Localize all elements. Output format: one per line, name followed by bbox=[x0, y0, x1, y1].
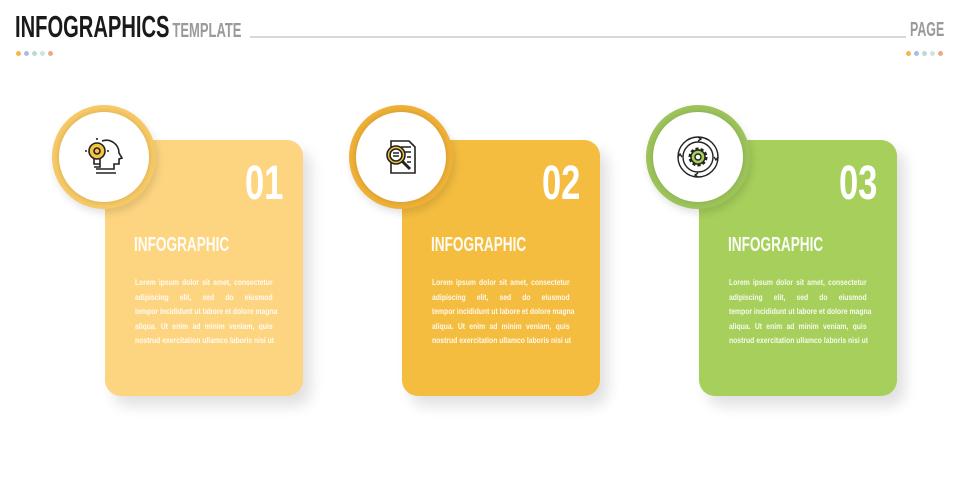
header title: INFOGRAPHICS TEMPLATE bbox=[15, 9, 241, 44]
panel 02 bbox=[402, 140, 600, 396]
icon circle 02: document magnifier bbox=[349, 105, 453, 209]
header line bbox=[250, 36, 906, 38]
heading 02: INFOGRAPHIC bbox=[431, 234, 526, 256]
body text 02: adipiscing elit, sed do eiusmod bbox=[432, 292, 570, 302]
body text 03: adipiscing elit, sed do eiusmod bbox=[729, 292, 867, 302]
icon circle 03: gear cycle bbox=[646, 105, 750, 209]
number 02: 02 bbox=[542, 157, 580, 210]
body text 02 bbox=[432, 277, 574, 345]
heading 01: INFOGRAPHIC bbox=[134, 234, 229, 256]
body text 01: aliqua. Ut enim ad minim veniam, quis bbox=[135, 320, 273, 330]
body text 01: tempor incididunt ut labore et dolore magna bbox=[135, 306, 277, 316]
body text 03 bbox=[729, 277, 872, 345]
body text 03: Lorem ipsum dolor sit amet, consectetur bbox=[729, 277, 867, 287]
body text 01: adipiscing elit, sed do eiusmod bbox=[135, 292, 273, 302]
panel 01 bbox=[105, 140, 303, 396]
body text 02: aliqua. Ut enim ad minim veniam, quis bbox=[432, 320, 570, 330]
body text 01: Lorem ipsum dolor sit amet, consectetur bbox=[135, 277, 273, 287]
body text 03: aliqua. Ut enim ad minim veniam, quis bbox=[729, 320, 867, 330]
body text 03: tempor incididunt ut labore et dolore magna bbox=[729, 306, 871, 316]
right dots bbox=[906, 51, 943, 56]
body text 01: nostrud exercitation ullamco laboris nisi ut bbox=[135, 335, 274, 345]
body text 01 bbox=[135, 277, 278, 345]
number 01: 01 bbox=[245, 157, 283, 210]
body text 02: nostrud exercitation ullamco laboris nisi ut bbox=[432, 335, 571, 345]
icon circle 01: lightbulb head bbox=[52, 105, 156, 209]
page label: PAGE bbox=[910, 19, 944, 41]
panel 03 bbox=[699, 140, 897, 396]
left dots bbox=[16, 51, 53, 56]
body text 03: nostrud exercitation ullamco laboris nisi ut bbox=[729, 335, 868, 345]
heading 03: INFOGRAPHIC bbox=[728, 234, 823, 256]
body text 02: Lorem ipsum dolor sit amet, consectetur bbox=[432, 277, 570, 287]
number 03: 03 bbox=[839, 157, 877, 210]
body text 02: tempor incididunt ut labore et dolore magna bbox=[432, 306, 574, 316]
